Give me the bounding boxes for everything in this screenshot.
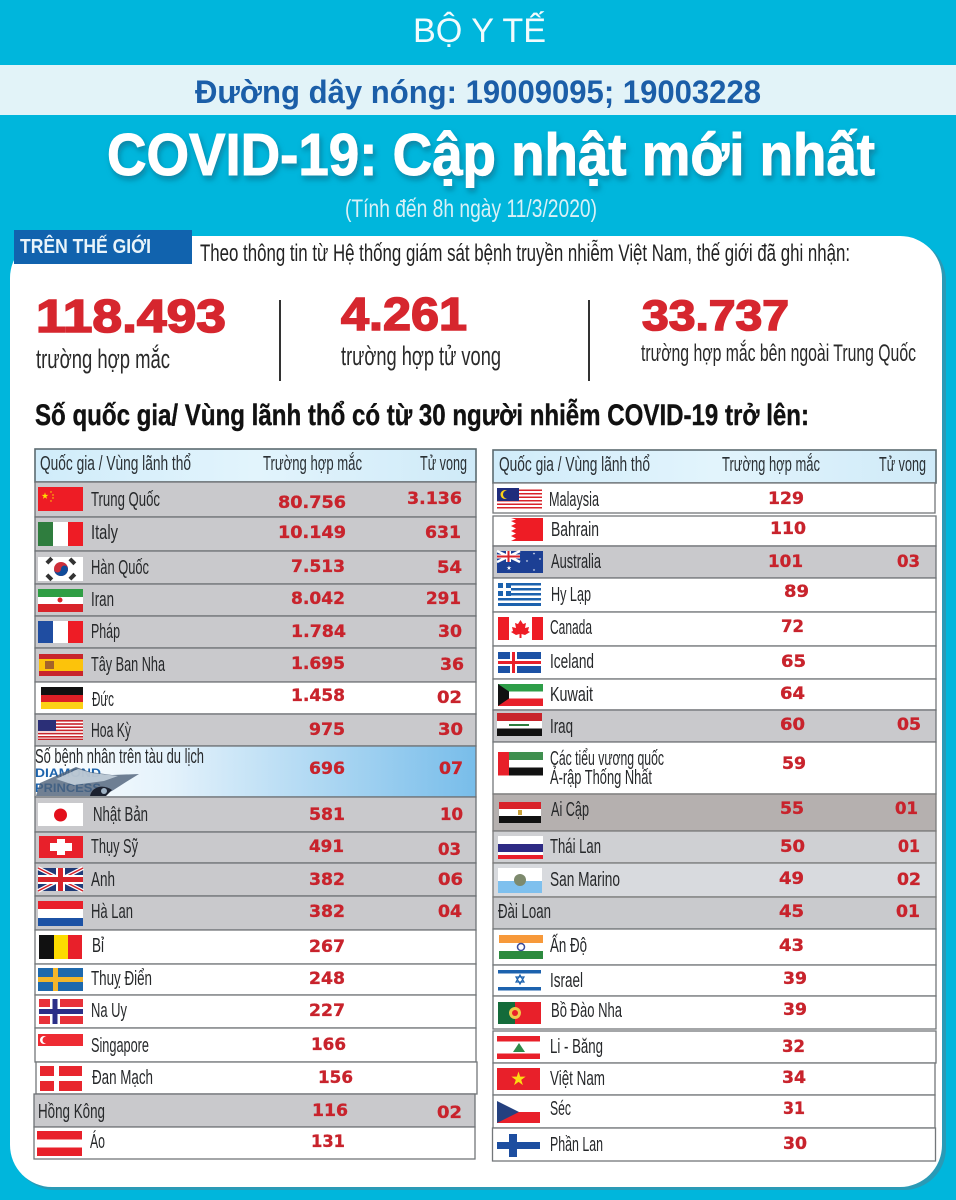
row: Iran: 291 [426,589,461,609]
row: Lebanon [493,1031,936,1063]
row: Portugal: 39 [783,1000,807,1020]
stat: total cases [36,290,226,374]
row: Czech Republic: 31 [783,1099,805,1119]
row: Italy [35,517,476,551]
row: Spain [35,648,476,682]
row: Israel [493,965,936,996]
row: Germany: 02 [437,688,462,708]
row: Bahrain: Bahrain [551,518,599,541]
table header right: Trường hợp mắc [722,453,820,476]
row: Spain: 1.695 [291,654,345,674]
table header left [35,449,476,482]
row: Australia: 101 [768,552,803,572]
row: Italy: 10.149 [278,523,346,543]
row: Switzerland: Thụy Sỹ [91,835,138,858]
row: Portugal: Bồ Đào Nha [551,999,622,1022]
row: Germany: Đức [92,688,114,711]
row: Diamond Princess ship: 07 [439,759,463,779]
row: Iran: Iran [91,588,114,611]
row: Netherlands: 382 [309,902,345,922]
row: San Marino: 02 [897,870,921,890]
title: COVID-19: Cập nhật mới nhất [107,122,875,188]
row: France: Pháp [91,620,120,643]
row: France [35,616,476,648]
row: Iceland: Iceland [550,650,594,673]
row: Kuwait [493,679,936,710]
heading: ministry name: BỘ Y TẾ [413,12,546,50]
row: Taiwan: Đài Loan [498,900,551,923]
row: USA [35,714,476,746]
row: Singapore: Singapore [91,1034,149,1057]
row: Egypt: 55 [780,799,804,819]
row: UAE: 59 [782,754,806,774]
row: Hong Kong: Hồng Kông [38,1100,105,1123]
row: Canada [493,612,936,646]
row: Lebanon: 32 [782,1037,805,1057]
row: Iceland: 65 [781,652,806,672]
row: Vietnam: Việt Nam [550,1067,605,1090]
row: Greece [493,578,936,612]
row: USA: Hoa Kỳ [91,719,131,742]
row: France: 1.784 [291,622,346,642]
row: China [35,482,476,517]
row: Spain: 36 [440,655,464,675]
row: Iceland [493,646,936,679]
row: Iraq: 05 [897,715,921,735]
row: Norway: 227 [309,1001,345,1021]
row: Denmark: 156 [318,1068,353,1088]
row: Japan: Nhật Bản [93,803,148,826]
row: Portugal [493,996,936,1029]
row: UK: 06 [438,870,463,890]
row: Thailand [493,831,936,863]
table: left column [34,449,477,1159]
row: Japan: 10 [440,805,463,825]
row: Thailand: 01 [898,837,920,857]
row: Iraq: 60 [780,715,805,735]
row: Egypt [493,794,936,831]
row: South Korea: Hàn Quốc [91,556,149,579]
row: Singapore: 166 [311,1035,346,1055]
stat: total cases: trường hợp mắc [36,343,170,374]
row: China: Trung Quốc [91,488,160,511]
row: UAE: Các tiểu vương quốc [550,747,664,770]
row: Switzerland [35,832,476,863]
divider stat 1 [279,300,281,381]
row: Netherlands: 04 [438,902,462,922]
row: Hong Kong: 02 [437,1103,462,1123]
row: South Korea: 7.513 [291,557,345,577]
row: Taiwan: 45 [779,902,804,922]
row: Diamond Princess ship: DIAMOND [35,766,101,780]
row: Hong Kong: 116 [312,1101,348,1121]
row: Diamond Princess ship: 696 [309,759,345,779]
stat: total cases: 118.493 [36,290,226,342]
row: Kuwait: Kuwait [550,683,593,706]
row: Japan [35,797,476,832]
row: Hong Kong [34,1094,475,1127]
row: UAE: Ả-rập Thống Nhất [550,766,652,789]
row: Egypt: 01 [895,799,918,819]
table header right: Quốc gia / Vùng lãnh thổ [499,454,650,476]
row: Czech Republic: Séc [550,1097,571,1120]
date note: (Tính đến 8h ngày 11/3/2020) [345,195,597,223]
row: Singapore [35,1028,476,1062]
row: Austria [34,1127,475,1159]
row: Denmark: Đan Mạch [92,1066,153,1089]
row: San Marino: San Marino [550,868,620,891]
row: Finland: Phần Lan [550,1133,603,1156]
row: Australia [493,546,936,578]
stat: deaths: 4.261 [341,288,467,340]
row: Israel: 39 [783,969,807,989]
stat: deaths: trường hợp tử vong [341,341,501,371]
row: UK [35,863,476,896]
row: Switzerland: 491 [309,837,344,857]
row: Belgium [35,930,476,964]
hotline band: Đường dây nóng: 19009095; 19003228 [195,74,761,110]
row: UK: 382 [309,870,345,890]
row: Israel: Israel [550,969,583,992]
stat: deaths [341,288,501,371]
row: Bahrain [493,516,936,546]
row: Italy: 631 [425,523,461,543]
row: UAE [493,742,936,794]
stat: outside China: 33.737 [642,292,789,340]
table header left: Tử vong [420,453,467,475]
hotline band [0,65,956,115]
row: Australia: 03 [897,552,920,572]
row: Denmark [36,1062,477,1094]
row: USA: 975 [309,720,345,740]
row: Greece: 89 [784,582,809,602]
row: Sweden: Thuỵ Điển [91,967,152,990]
row: Vietnam [493,1063,935,1095]
row: San Marino: 49 [779,869,804,889]
row: Diamond Princess ship: PRINCESS [35,781,101,795]
row: Thailand: 50 [780,837,805,857]
row: Finland [492,1128,936,1161]
row: India [493,929,936,965]
table header right [493,450,936,483]
table header right: Tử vong [879,454,926,476]
row: Iran [35,584,476,616]
row: Austria: Áo [90,1130,105,1153]
row: Taiwan: 01 [896,902,920,922]
row: India: Ấn Độ [550,934,587,957]
row: Germany: 1.458 [291,686,345,706]
row: Malaysia: 129 [768,489,804,509]
table header left: Quốc gia / Vùng lãnh thổ [40,453,191,475]
row: Taiwan [493,897,936,929]
row: San Marino [493,863,936,897]
row: Norway [35,995,476,1028]
row: Australia: Australia [551,550,601,573]
row: Canada: Canada [550,616,592,639]
row: Lebanon: Li - Băng [550,1035,603,1058]
row: Malaysia [493,483,935,513]
row: Belgium: 267 [309,937,345,957]
row: Netherlands [35,896,476,930]
row: Greece: Hy Lạp [551,583,591,606]
row: Vietnam: 34 [782,1068,806,1088]
row: UK: Anh [91,868,115,891]
row: Iraq: Iraq [550,715,573,738]
row: France: 30 [438,622,462,642]
row: USA: 30 [438,720,463,740]
row: Thailand: Thái Lan [550,835,601,858]
row: Kuwait: 64 [780,684,805,704]
row: Netherlands: Hà Lan [91,900,133,923]
row: Egypt: Ai Cập [551,798,589,821]
row: Canada: 72 [781,617,804,637]
row: Italy: Italy [91,521,119,544]
row: India: 43 [779,936,804,956]
divider stat 2 [588,300,590,381]
row: Belgium: Bỉ [92,934,104,957]
stat: outside China [641,292,916,367]
row: Spain: Tây Ban Nha [91,653,165,676]
row: Iran: 8.042 [291,589,345,609]
row: Switzerland: 03 [438,840,461,860]
panel: white content card [10,236,946,1190]
row: Iraq [493,710,936,742]
row: Malaysia: Malaysia [549,488,599,511]
row: Austria: 131 [311,1132,345,1152]
row: Czech Republic [493,1095,935,1128]
row: Diamond Princess ship [35,745,476,797]
row: Bahrain: 110 [770,519,806,539]
row: Diamond Princess ship: Số bệnh nhân trên tàu du lịch [35,745,204,768]
row: Germany [35,682,476,714]
row: China: 80.756 [278,493,346,513]
row: Finland: 30 [783,1134,807,1154]
row: South Korea: 54 [437,558,462,578]
row: South Korea [35,551,476,584]
table header left: Trường hợp mắc [263,452,362,475]
table: right column [492,450,936,1161]
label: world section [14,230,192,264]
row: China: 3.136 [407,489,462,509]
row: Sweden: 248 [309,969,345,989]
label: world section: TRÊN THẾ GIỚI [20,234,151,258]
row: Sweden [35,964,476,995]
row: Japan: 581 [309,805,345,825]
row: Norway: Na Uy [91,999,127,1022]
